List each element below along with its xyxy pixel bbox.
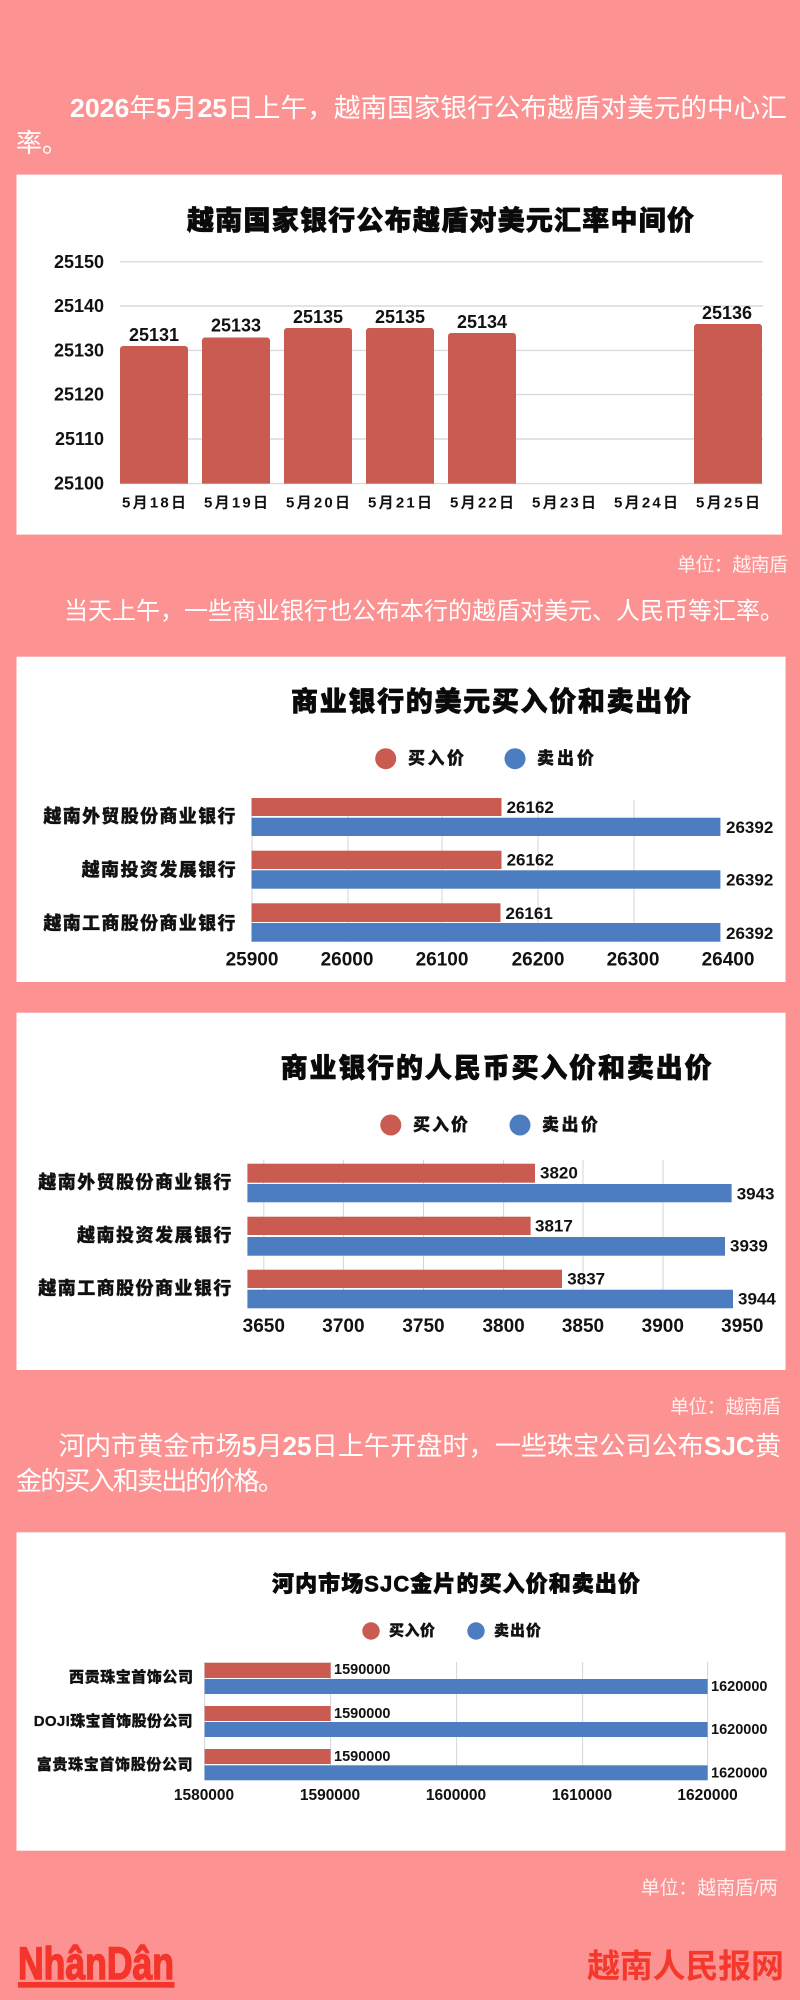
company labels: DOJI珠宝首饰股份公司 [34,1712,193,1730]
x axis labels: 3800 [482,1316,525,1337]
vertical grid lines [205,1662,708,1780]
x axis date labels: 5月18日 [122,494,186,512]
x axis date labels: 5月25日 [696,494,760,512]
chart title: 河内市场SJC金片的买入价和卖出价 [272,1572,640,1596]
unit note 3: 单位：越南盾/两 [641,1877,778,1899]
chart title: 越南国家银行公布越盾对美元汇率中间价 [187,205,694,236]
legend [362,1622,541,1640]
value labels: 3820 [540,1164,578,1182]
logo: Nhan Dan: NhânDân [18,1938,174,1989]
x axis labels: 1610000 [552,1787,612,1804]
value labels [129,303,752,345]
y axis grid lines and labels: 25120 [54,385,104,405]
x axis labels [226,950,754,970]
x axis labels: 25900 [226,950,278,970]
bank labels: 越南外贸股份商业银行 [38,1172,231,1193]
value labels: 3939 [730,1236,768,1256]
value labels: 26392 [726,924,773,943]
value labels: 3944 [738,1290,776,1308]
legend: 买入价 [413,1114,468,1134]
value labels: 1590000 [334,1749,390,1765]
x axis labels [243,1316,763,1337]
text block: central rate intro: 2026年5月25日上午，越南国家银行公布越盾对美元的中心汇 [70,93,787,123]
x axis date labels [122,494,760,512]
unit note 2: 单位：越南盾 [670,1396,781,1418]
y axis grid lines and labels: 25140 [54,296,104,316]
logo: Vietnamese People's Daily wordmark: 越南人民报网 [587,1948,784,1984]
bars [120,324,762,484]
y axis grid lines and labels [54,252,763,494]
x axis labels: 1590000 [300,1787,360,1804]
bank labels [43,806,236,933]
x axis date labels: 5月24日 [614,494,678,512]
chart title: 商业银行的人民币买入价和卖出价 [281,1053,712,1083]
value labels: 26161 [506,904,553,923]
unit note 1: 单位：越南盾 [677,554,788,576]
y axis grid lines and labels: 25110 [55,429,104,449]
company labels: 富贵珠宝首饰股份公司 [37,1756,193,1774]
x axis labels: 1580000 [174,1787,234,1804]
value labels: 3817 [535,1216,573,1236]
value labels: 25135 [375,307,425,327]
legend [375,748,594,769]
bars [252,798,720,942]
y axis grid lines and labels: 25130 [54,340,104,360]
x axis date labels: 5月22日 [450,494,514,512]
x axis date labels: 5月23日 [532,494,596,512]
x axis labels [174,1787,738,1804]
legend: 卖出价 [494,1622,541,1640]
text block: gold market intro: 河内市黄金市场5月25日上午开盘时，一些珠宝公司公布SJC黄 [59,1431,781,1461]
value labels: 26162 [507,850,554,870]
value labels: 26392 [726,870,773,890]
y axis grid lines and labels: 25150 [54,252,104,272]
x axis date labels: 5月21日 [368,494,432,512]
bank labels: 越南工商股份商业银行 [38,1278,231,1299]
vertical grid lines [252,800,634,942]
value labels: 25134 [457,312,507,332]
x axis labels: 3700 [322,1316,365,1337]
x axis labels: 3850 [562,1316,604,1337]
text block: gold market intro [16,1431,781,1496]
bank labels: 越南外贸股份商业银行 [43,806,235,827]
x axis labels: 26100 [416,950,468,970]
x axis labels: 1600000 [426,1787,486,1804]
value labels [506,798,773,943]
value labels: 25131 [129,325,179,345]
bank labels: 越南投资发展银行 [82,859,236,880]
panel: CNY buy and sell bar chart [16,1013,786,1370]
company labels [34,1668,193,1774]
y axis grid lines and labels: 25100 [54,474,104,494]
value labels: 1620000 [711,1679,767,1695]
value labels: 25133 [211,316,261,336]
x axis labels: 1620000 [677,1787,738,1804]
text block: commercial banks intro: 当天上午，一些商业银行也公布本行的越盾对美元、人民币等汇率。 [64,598,784,625]
chart title: 商业银行的美元买入价和卖出价 [291,686,691,717]
value labels: 1590000 [334,1662,390,1678]
bars [247,1164,733,1308]
value labels [334,1662,767,1781]
legend [380,1114,598,1136]
x axis date labels: 5月19日 [204,494,268,512]
x axis labels: 26000 [321,950,373,970]
legend: 买入价 [389,1622,435,1640]
x axis labels: 26200 [512,950,564,970]
value labels: 25136 [702,303,752,323]
value labels [535,1164,776,1308]
legend: 卖出价 [542,1114,598,1134]
value labels: 1620000 [711,1722,767,1738]
panel: central rate column chart [16,175,782,535]
text block: central rate intro [16,93,787,158]
bars [205,1663,708,1780]
text block: gold market intro: 金的买入和卖出的价格。 [16,1466,284,1496]
vertical grid lines [264,1160,663,1308]
value labels: 26162 [507,798,554,817]
x axis labels: 3750 [402,1316,445,1337]
bank labels: 越南投资发展银行 [77,1225,232,1246]
panel: USD buy and sell bar chart [16,657,786,982]
value labels: 1590000 [334,1706,390,1722]
panel: SJC gold buy and sell bar chart [16,1532,786,1851]
legend: 买入价 [408,748,464,768]
x axis labels: 26300 [607,950,659,970]
x axis labels: 26400 [702,950,754,970]
legend: 卖出价 [537,748,594,768]
company labels: 西贡珠宝首饰公司 [69,1668,193,1686]
value labels: 3837 [567,1270,605,1288]
value labels: 25135 [293,307,343,327]
x axis labels: 3650 [243,1316,285,1337]
bank labels: 越南工商股份商业银行 [43,912,235,933]
x axis labels: 3900 [642,1316,684,1337]
value labels: 26392 [726,818,773,837]
text block: central rate intro: 率。 [16,128,68,158]
value labels: 3943 [737,1184,775,1204]
x axis date labels: 5月20日 [286,494,350,512]
bank labels [38,1172,231,1299]
value labels: 1620000 [711,1765,767,1781]
x axis labels: 3950 [721,1316,763,1337]
